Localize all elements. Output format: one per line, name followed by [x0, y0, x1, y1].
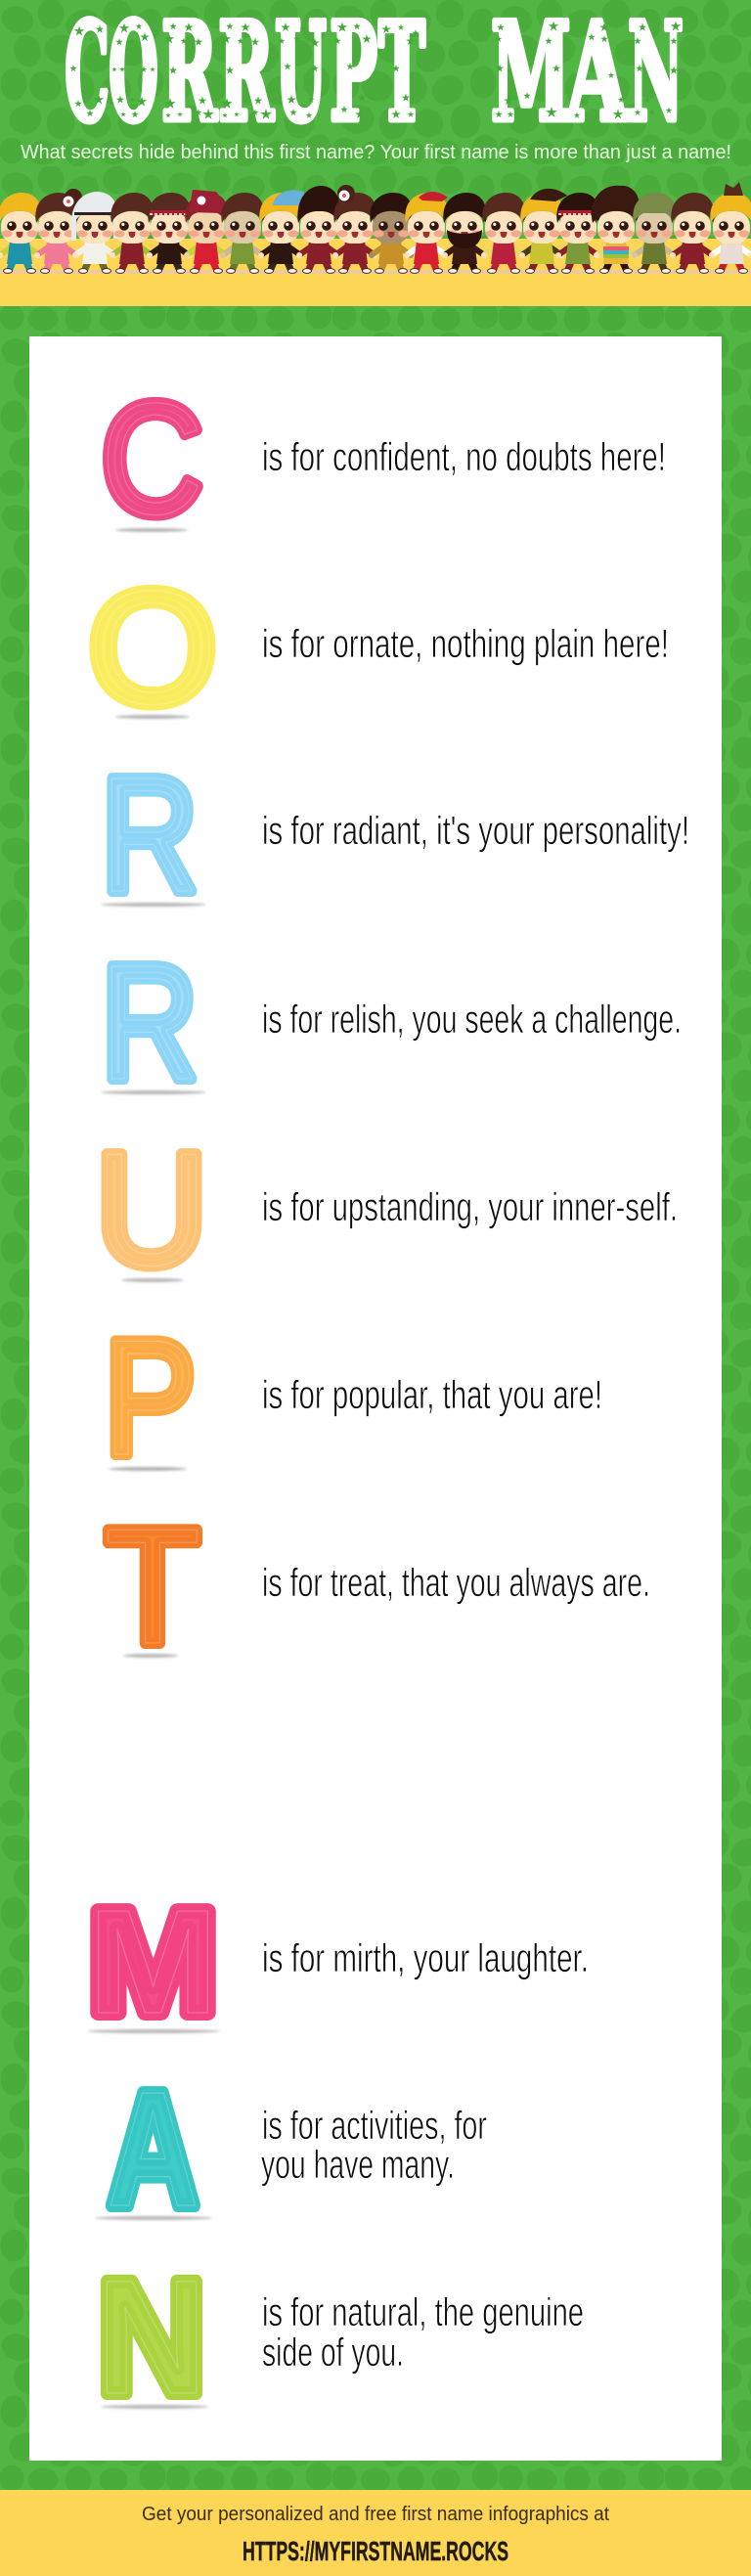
row: N is for natural: [97, 2247, 584, 2428]
footer prompt: Get your personalized and free first name infographics at: [142, 2504, 609, 2525]
letter icon A: A: [108, 2059, 199, 2241]
row: P is for popular: [104, 1306, 602, 1489]
child 4: brown hair, maroon: [110, 193, 155, 273]
letter icon U: U: [95, 1120, 208, 1299]
letter icon C: C: [101, 371, 203, 548]
title: CORRUPT MAN: [65, 0, 684, 152]
child 19: brown hair, maroon: [670, 193, 715, 273]
yellow band: [0, 239, 751, 306]
child 14: brown hair, dotted skirt: [481, 193, 526, 273]
row: R is for relish: [101, 932, 682, 1114]
child 11: dark skin, mustard: [369, 193, 414, 273]
child 8: blond, blue cap: [258, 191, 304, 273]
child 1: blond, blue overalls: [0, 193, 42, 273]
letter icon R: R: [101, 744, 199, 926]
row: C is for confident: [101, 371, 666, 548]
row: A is for activities: [95, 2059, 487, 2241]
child 5: headband, black outfit: [147, 193, 192, 273]
child 2: flower, pink kimono: [34, 189, 82, 273]
child 17: spiky hair, rainbow stripes: [592, 186, 640, 273]
row: O is for ornate: [88, 557, 669, 737]
row of cartoon children holding hands: [0, 182, 751, 273]
text: is for popular, that you are!: [262, 1372, 602, 1417]
row: M is for mirth: [87, 1879, 589, 2044]
child 15: blond, maroon: [519, 189, 567, 273]
letter icon P: P: [104, 1306, 197, 1489]
child 3: white headscarf: [71, 192, 119, 273]
letter icon R: R: [101, 744, 199, 926]
letter icon T: T: [105, 1494, 200, 1678]
letter icon R: R: [101, 932, 199, 1114]
letter icon T: T: [105, 1494, 200, 1678]
text: is for mirth, your laughter.: [262, 1935, 589, 1980]
text: [262, 2289, 584, 2375]
letter icon O: O: [88, 557, 217, 737]
child 6: red fez, red skirt: [184, 190, 229, 273]
row: T is for treat: [105, 1494, 650, 1678]
letter icon M: M: [88, 1879, 218, 2044]
title stars: [69, 22, 681, 119]
footer: [0, 2490, 751, 2576]
child 9: tall dark hair, maroon: [296, 186, 341, 273]
text: is for activities, for: [262, 2103, 487, 2148]
letter icon R: R: [101, 932, 199, 1114]
child 12: blond, red dress: [404, 192, 449, 273]
panel: white content area: [29, 336, 722, 2461]
child 16: headband, maroon and green: [555, 193, 600, 273]
child 20: blond, white and red: [709, 182, 751, 273]
row: U is for upstanding: [95, 1120, 678, 1299]
row: R is for radiant: [101, 744, 689, 926]
letter icon U: U: [95, 1120, 208, 1299]
letter icon P: P: [104, 1306, 197, 1489]
letter icon A: A: [108, 2059, 199, 2241]
text: side of you.: [262, 2330, 404, 2375]
letter icon N: N: [97, 2247, 206, 2428]
child 7: tan skin, grass skirt: [220, 193, 265, 273]
letter icon C: C: [101, 371, 203, 548]
footer URL: HTTPS://MYFIRSTNAME.ROCKS: [243, 2536, 508, 2566]
text: [261, 2103, 487, 2187]
letter icon O: O: [88, 557, 217, 737]
child 10: flower, maroon: [332, 185, 377, 273]
child 13: black hair, beard: [442, 193, 487, 273]
letter icon N: N: [97, 2247, 206, 2428]
text: is for natural, the genuine: [262, 2289, 584, 2334]
letter icon M: M: [88, 1879, 218, 2044]
text: you have many.: [261, 2142, 455, 2187]
child 18: green leaf hat, grass skirt: [632, 193, 677, 273]
header: [21, 0, 731, 163]
tagline: What secrets hide behind this first name? Your first name is more than just a name!: [21, 141, 731, 163]
